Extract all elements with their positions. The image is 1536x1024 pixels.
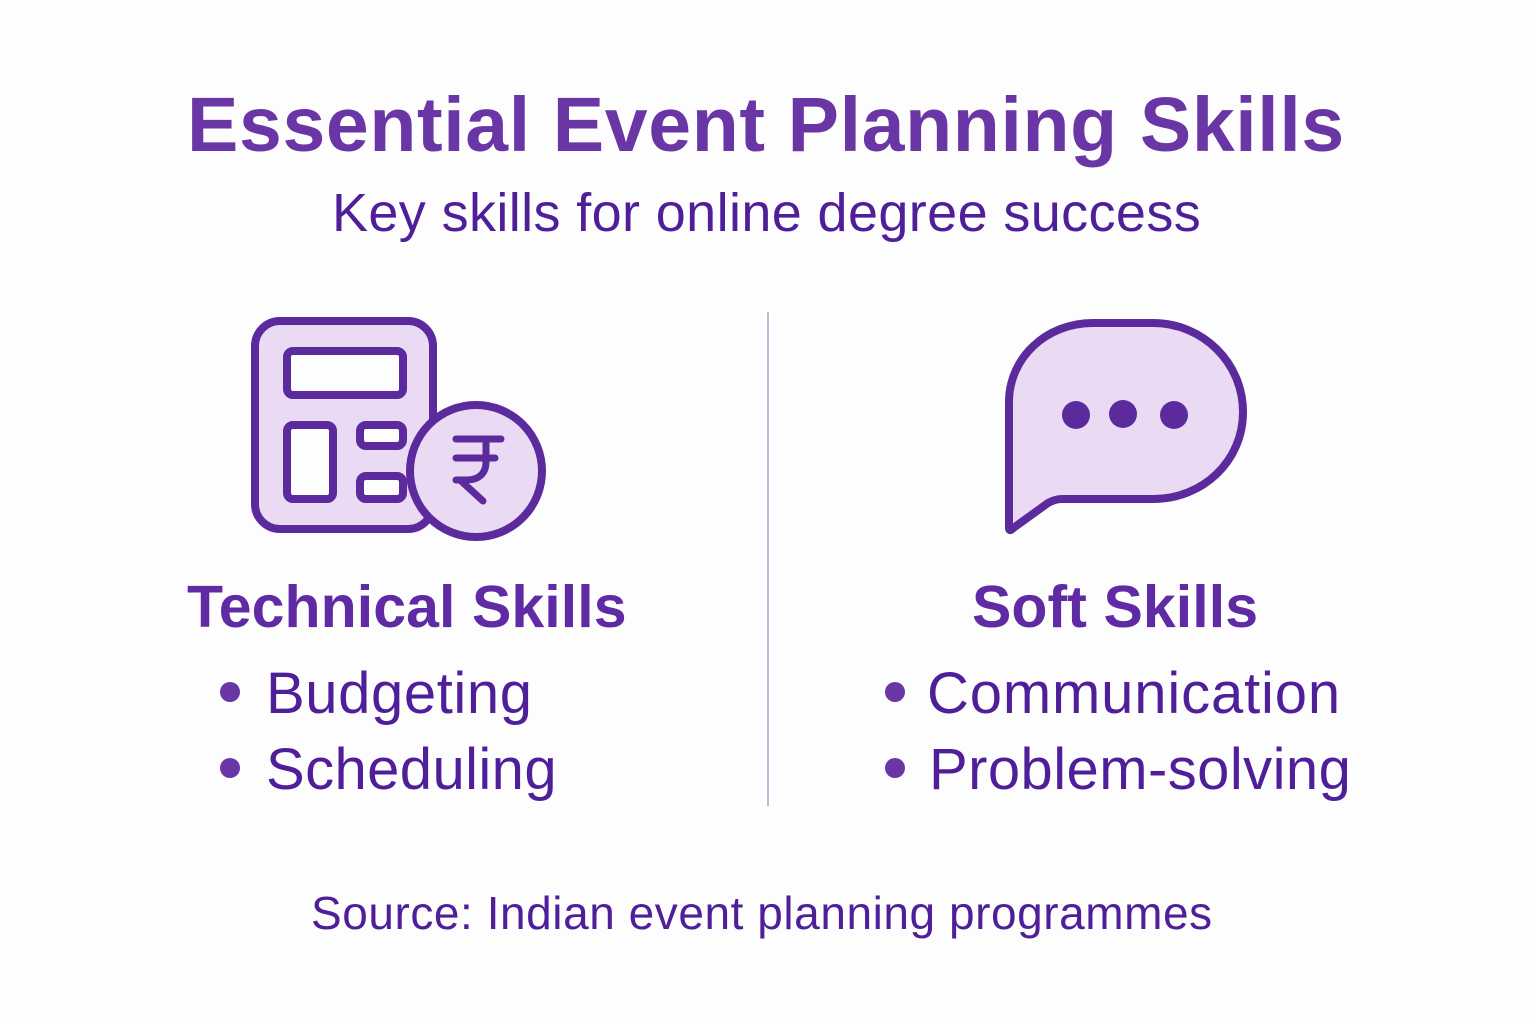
title: Essential Event Planning Skills (187, 82, 1345, 168)
list: soft skills (885, 661, 1351, 802)
bullet (220, 682, 240, 702)
list: technical skills (220, 661, 557, 802)
heading: technical skills: Technical Skills (187, 574, 627, 640)
bullet (885, 682, 905, 702)
item: scheduling: Scheduling (266, 737, 557, 802)
heading: soft skills: Soft Skills (972, 574, 1258, 640)
item: budgeting: Budgeting (266, 661, 533, 726)
bullet (885, 758, 905, 778)
icon: calculator with rupee coin (251, 317, 546, 541)
source note: Source: Indian event planning programmes (311, 887, 1213, 939)
center divider (767, 312, 769, 806)
item: communication: Communication (927, 661, 1341, 726)
icon: speech bubble (1005, 319, 1247, 534)
item: problem-solving: Problem-solving (929, 737, 1351, 802)
bullet (220, 758, 240, 778)
subtitle: Key skills for online degree success (332, 183, 1201, 243)
